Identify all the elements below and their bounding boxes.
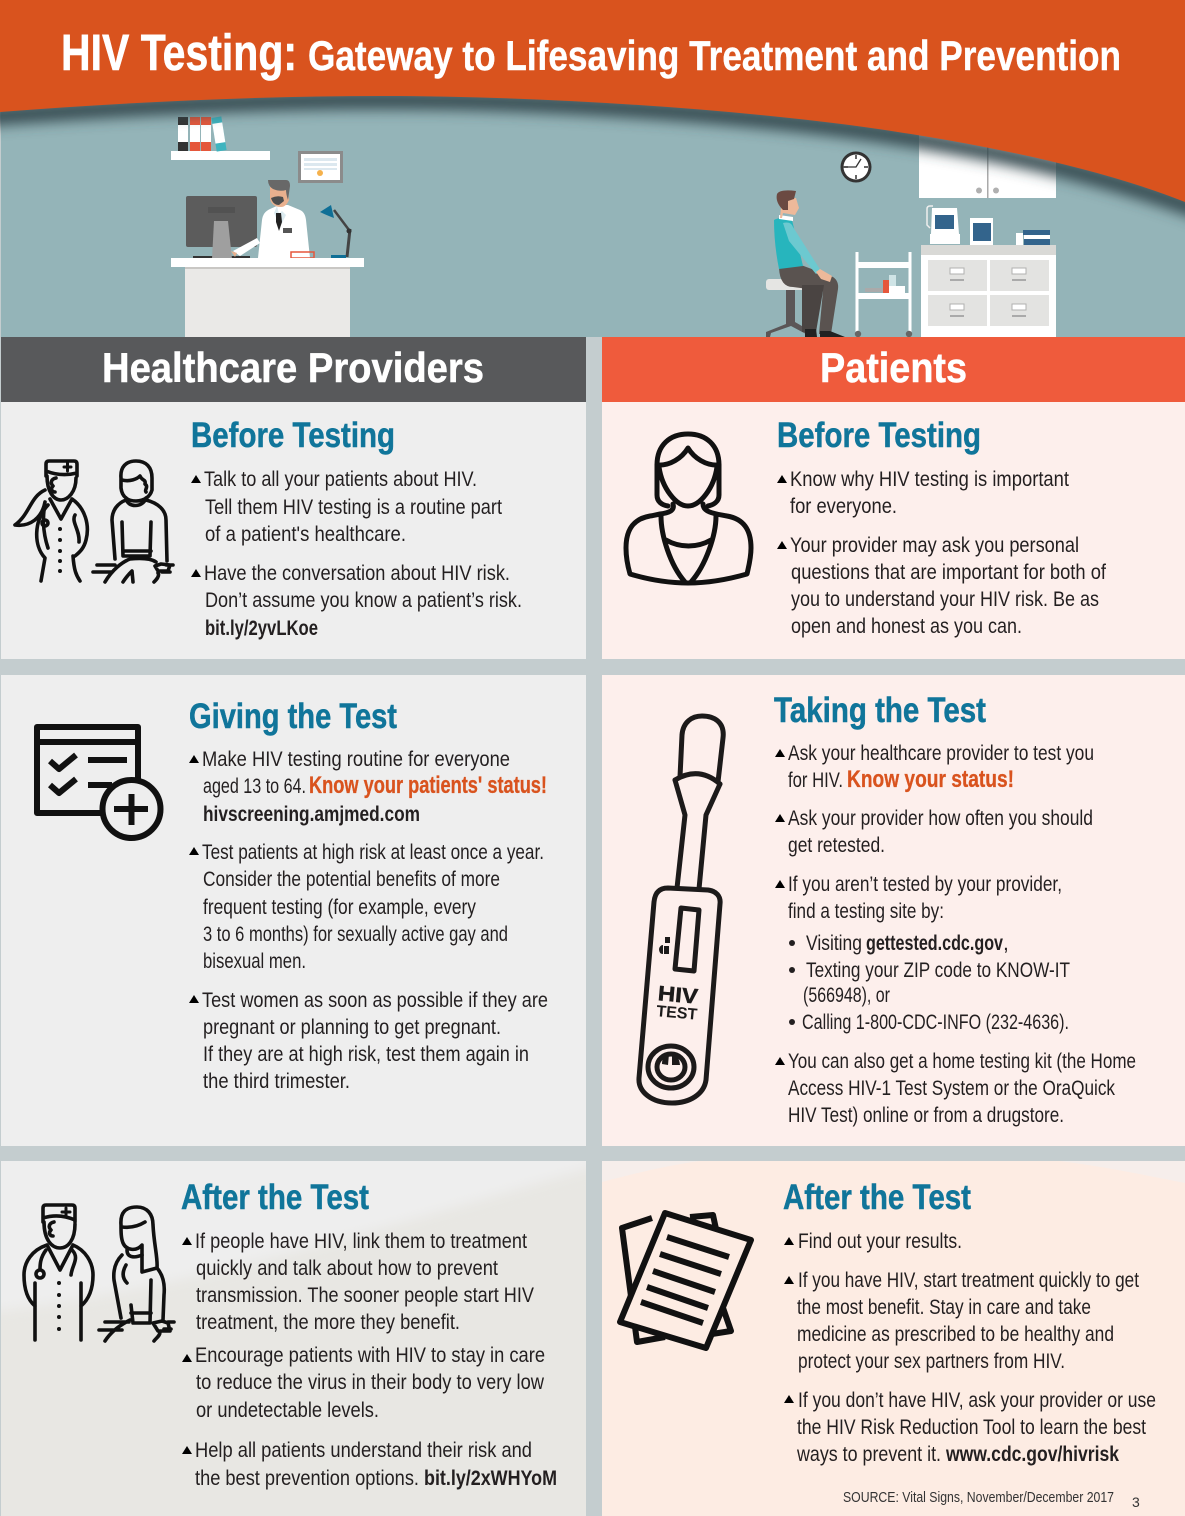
icon: HIV test device xyxy=(639,716,723,1103)
text: taking bullets: for HIV. xyxy=(788,769,843,792)
text: giving bullets: aged 13 to 64. xyxy=(203,775,306,798)
text: taking bullets: Texting your ZIP code to KNOW-IT xyxy=(806,959,1070,982)
title text: HIV Testing: xyxy=(61,24,297,81)
text: taking bullets: , xyxy=(1003,932,1009,955)
text: provider after bullets: Encourage patients with HIV to stay in care xyxy=(195,1344,545,1367)
text: before testing bullets: Don’t assume you know a patient’s risk. xyxy=(205,589,522,612)
text: giving bullets: Make HIV testing routine for everyone xyxy=(202,748,510,771)
heading: Before Testing xyxy=(191,416,395,455)
panel: patients before testing xyxy=(602,402,1185,659)
text: giving bullets: frequent testing (for example, every xyxy=(203,896,476,919)
panel: providers before testing xyxy=(1,402,586,659)
text: patient before bullets xyxy=(777,468,1106,638)
text: before testing bullets: bit.ly/2yvLKoe xyxy=(205,617,318,640)
panel: patients after the test xyxy=(602,1161,1185,1516)
icon: papers xyxy=(620,1213,751,1348)
text: patient before bullets: for everyone. xyxy=(790,495,897,518)
icon: woman xyxy=(626,434,751,583)
text: giving bullets: pregnant or planning to get pregnant. xyxy=(203,1016,501,1039)
text: giving bullets: bisexual men. xyxy=(203,950,306,973)
text: taking bullets: get retested. xyxy=(788,834,885,857)
text: giving bullets: Test women as soon as possible if they are xyxy=(202,989,548,1012)
illustration: patient in exam room xyxy=(766,130,1056,337)
illustration: doctor at desk xyxy=(171,116,364,337)
text: giving bullets: Know your patients' status! xyxy=(309,772,547,799)
page number: 3 xyxy=(1132,1494,1140,1510)
text: patient after bullets: the most benefit. Stay in care and take xyxy=(797,1296,1091,1319)
text: giving bullets: If they are at high risk, test them again in xyxy=(203,1043,529,1066)
text: giving bullets: Consider the potential benefits of more xyxy=(203,868,500,891)
text: provider after bullets: transmission. The sooner people start HIV xyxy=(196,1284,534,1307)
text: provider after bullets: bit.ly/2xWHYoM xyxy=(424,1467,557,1490)
text: patient after bullets: protect your sex partners from HIV. xyxy=(798,1350,1065,1373)
text: patient before bullets: Your provider may ask you personal xyxy=(790,534,1079,557)
column header: Patients xyxy=(602,337,1185,402)
text: patient after bullets: www.cdc.gov/hivrisk xyxy=(945,1443,1119,1466)
icon: doctor and woman patient xyxy=(24,1205,174,1341)
text: provider after bullets: If people have HIV, link them to treatment xyxy=(195,1230,527,1253)
text: taking bullets: Know your status! xyxy=(847,766,1014,793)
text: provider after bullets: quickly and talk about how to prevent xyxy=(196,1257,498,1280)
text: taking bullets: gettested.cdc.gov xyxy=(866,932,1003,955)
title banner xyxy=(0,0,1185,202)
panel: giving the test xyxy=(1,675,586,1146)
source note: SOURCE: Vital Signs, November/December 2017 xyxy=(843,1489,1114,1506)
text: provider after bullets: or undetectable levels. xyxy=(196,1399,379,1422)
text: patient after bullets xyxy=(784,1230,1156,1466)
text: giving bullets: Test patients at high risk at least once a year. xyxy=(202,841,544,864)
column header: Healthcare Providers: Healthcare Providers xyxy=(102,344,484,391)
text: patient after bullets: medicine as prescribed to be healthy and xyxy=(797,1323,1114,1346)
column header: Healthcare Providers xyxy=(1,337,586,402)
text: provider after bullets xyxy=(182,1230,557,1490)
text: patient after bullets: ways to prevent it. xyxy=(796,1443,941,1466)
text: taking bullets: HIV Test) online or from a drugstore. xyxy=(788,1104,1064,1127)
shadow under header curve xyxy=(0,100,1185,216)
text: patient before bullets: open and honest as you can. xyxy=(791,615,1022,638)
heading: Taking the Test xyxy=(774,691,986,730)
text: before testing bullets: Tell them HIV testing is a routine part xyxy=(205,496,502,519)
icon: checklist with plus xyxy=(37,727,160,838)
text: taking bullets: Access HIV-1 Test System or the OraQuick xyxy=(788,1077,1115,1100)
text: taking bullets: find a testing site by: xyxy=(788,900,944,923)
text: giving bullets: 3 to 6 months) for sexually active gay and xyxy=(203,923,508,946)
icon: nurse and patient xyxy=(15,461,173,582)
text: patient after bullets: Find out your results. xyxy=(798,1230,962,1253)
panel: providers after the test xyxy=(0,1160,620,1516)
text: giving bullets xyxy=(189,748,548,1093)
panel: taking the test xyxy=(602,675,1185,1146)
column header: Patients: Patients xyxy=(820,344,967,391)
text: giving bullets: the third trimester. xyxy=(203,1070,350,1093)
text: patient before bullets: you to understand your HIV risk. Be as xyxy=(791,588,1099,611)
text: provider after bullets: the best prevention options. xyxy=(195,1467,419,1490)
heading: Before Testing xyxy=(777,416,981,455)
text: taking bullets: Calling 1-800-CDC-INFO (232-4636). xyxy=(802,1011,1069,1034)
text: provider after bullets: to reduce the virus in their body to very low xyxy=(196,1371,545,1394)
hero scene: clinic wall xyxy=(0,90,1185,337)
text: before testing bullets: of a patient's healthcare. xyxy=(205,523,406,546)
text: patient before bullets: Know why HIV testing is important xyxy=(790,468,1069,491)
icon: HIV test device: HIV xyxy=(657,982,699,1009)
text: before testing bullets: Talk to all your patients about HIV. xyxy=(204,468,477,491)
text: taking bullets: Ask your healthcare provider to test you xyxy=(788,742,1094,765)
text: taking bullets: If you aren’t tested by your provider, xyxy=(788,873,1062,896)
text: taking bullets xyxy=(775,742,1136,1127)
text: provider after bullets: Help all patients understand their risk and xyxy=(195,1439,532,1462)
text: provider after bullets: treatment, the more they benefit. xyxy=(196,1311,460,1334)
heading: After the Test xyxy=(783,1178,971,1217)
heading: Giving the Test xyxy=(189,697,397,736)
text: taking bullets: Ask your provider how often you should xyxy=(788,807,1093,830)
text: patient before bullets: questions that are important for both of xyxy=(791,561,1106,584)
text: before testing bullets: Have the conversation about HIV risk. xyxy=(204,562,510,585)
title text xyxy=(61,24,1121,81)
icon: HIV test device: TEST xyxy=(656,1003,698,1024)
text: before testing bullets xyxy=(191,468,522,640)
heading: After the Test xyxy=(181,1178,369,1217)
text: giving bullets: hivscreening.amjmed.com xyxy=(203,803,420,826)
text: taking bullets: (566948), or xyxy=(803,984,890,1007)
text: taking bullets: Visiting xyxy=(806,932,862,955)
